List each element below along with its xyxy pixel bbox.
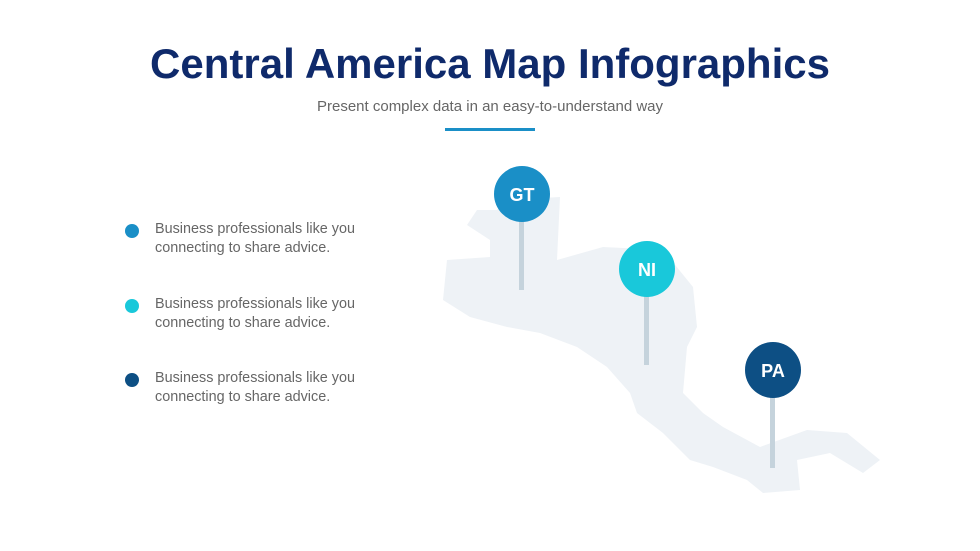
pin: PA: PA <box>761 361 785 381</box>
pin: GT <box>494 166 550 290</box>
list item 1: connecting to share advice. <box>155 240 330 256</box>
list item 3 <box>125 370 355 405</box>
list item 1 <box>125 221 355 256</box>
subtitle: Present complex data in an easy-to-understand way <box>317 98 663 115</box>
list item 2: connecting to share advice. <box>155 315 330 331</box>
list item 2: Business professionals like you <box>155 296 355 312</box>
list item 3: connecting to share advice. <box>155 389 330 405</box>
pin: PA <box>745 342 801 468</box>
underline accent <box>445 128 535 131</box>
pin: GT: GT <box>510 185 535 205</box>
list item 2 <box>125 296 355 331</box>
title: Central America Map Infographics <box>150 40 830 87</box>
list item 1: Business professionals like you <box>155 221 355 237</box>
list item 3: Business professionals like you <box>155 370 355 386</box>
pin: NI <box>619 241 675 365</box>
map: central america <box>443 197 880 493</box>
pin: NI: NI <box>638 260 656 280</box>
